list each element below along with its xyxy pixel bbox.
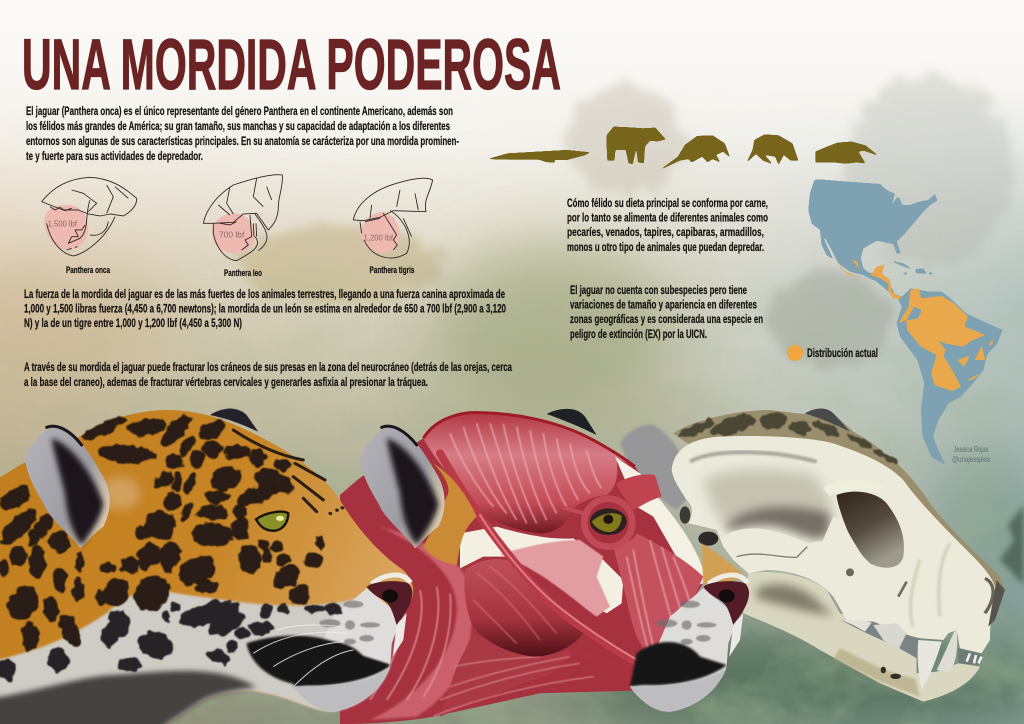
icon: tapir (607, 127, 666, 164)
orange fur on snout (702, 543, 745, 584)
ear (25, 426, 110, 548)
intro text block: te y fuerte para sus actividades de depredador. (26, 149, 203, 163)
ear with fur patch (360, 426, 477, 565)
second ear sliver (547, 409, 597, 435)
muzzle (293, 575, 412, 712)
icon: armadillo (660, 135, 730, 170)
subspecies text block: peligro de extinción (EX) por la UICN. (570, 327, 707, 341)
muscle: lower bands (570, 647, 650, 688)
muscle: neck (370, 527, 593, 720)
subspecies text block: zonas geográficas y es considerada una especie en (570, 312, 763, 326)
intro text block: El jaguar (Panthera onca) es el único representante del género Panthera en el continente Americano, además son (26, 104, 453, 118)
skull: mandible (743, 572, 980, 702)
spots on pale fur (0, 596, 341, 680)
legend: current distribution: Distribución actual (807, 346, 878, 360)
subspecies text block: variaciones de tamaño y apariencia en diferentes (570, 298, 757, 312)
skull: eye socket (837, 492, 904, 568)
skull diagram: Panthera tigris (353, 178, 433, 258)
skull: jaw shadow (757, 584, 833, 615)
author credit: Jessica Rojas (954, 444, 988, 454)
map: South America (897, 288, 1003, 465)
subspecies text block (570, 283, 763, 341)
bite force text block: 1,000 y 1,500 libras fuerza (4,450 a 6,700 newtons); la mordida de un león se estima en alrededor de 650 a 700 lbf (2,900 a 3,120 (24, 302, 506, 316)
eye (256, 512, 288, 531)
label: Panthera onca: Panthera onca (66, 265, 110, 276)
illustration: jaguar head with fur (0, 409, 413, 724)
distribution map of the Americas (808, 179, 1003, 465)
diet text block: monos u otro tipo de animales que puedan depredar. (567, 240, 764, 254)
fur base (0, 410, 413, 724)
label: Panthera leo: Panthera leo (224, 268, 262, 279)
bite force text block (24, 287, 506, 330)
map: South America range (898, 288, 993, 391)
author credit: @unajessjess (952, 454, 990, 464)
diet text block: pecaríes, venados, tapires, capibaras, armadillos, (567, 225, 764, 239)
diet text block: Cómo félido su dieta principal se conforma por carne, (567, 196, 768, 210)
diet text block (567, 196, 768, 254)
skull fracture text block (24, 360, 512, 389)
skull: auditory openings (698, 532, 718, 546)
label: Panthera tigris: Panthera tigris (370, 265, 414, 276)
intro text block (26, 104, 459, 163)
pale underside fur (0, 591, 400, 724)
illustration: jaguar muscle anatomy (340, 409, 749, 724)
muscle: cheek (500, 540, 610, 617)
muscle: base silhouette (340, 413, 703, 724)
illustration: faded jaguar behind the skull (620, 408, 1005, 633)
muscle: snout levators (613, 533, 703, 658)
skull: nasal opening (985, 578, 993, 613)
forehead stripes (233, 430, 343, 514)
subspecies text block: El jaguar no cuenta con subespecies pero tiene (570, 283, 747, 297)
diet text block: por lo tanto se alimenta de diferentes animales como (567, 210, 768, 224)
skull: cranium (672, 436, 996, 653)
icon: peccary (747, 134, 798, 165)
map: Central America range (832, 248, 905, 299)
skull diagram: Panthera leo (203, 175, 282, 261)
icon: caiman (488, 150, 590, 163)
whiskers (253, 625, 353, 687)
illustration: jaguar skull (672, 436, 1005, 702)
bone: zygomatic and cheek (460, 527, 623, 613)
muscle: temporalis (423, 413, 635, 533)
skull comparison diagrams (42, 175, 433, 279)
map: North and Central America (808, 179, 937, 301)
skull fracture text block: A través de su mordida el jaguar puede fracturar los cráneos de sus presas en la zona del neurocráneo (detrás de las orejas, cerca (24, 360, 512, 374)
prey silhouettes (488, 127, 878, 170)
intro text block: los félidos más grandes de América; su gran tamaño, sus manchas y su capacidad de adaptación a los diferentes (26, 119, 450, 133)
skull: teeth (842, 620, 983, 689)
dark throat shadow (0, 671, 257, 724)
bone: snout (615, 457, 703, 587)
rosettes and spots (0, 412, 324, 650)
skull diagram: Panthera tigris: 1,200 lbf (364, 233, 393, 243)
far ear (210, 409, 258, 432)
skull diagram: Panthera onca: 1,500 lbf (48, 218, 78, 228)
black lip band (247, 636, 390, 685)
intro text block: entornos son algunas de sus características principales. En su anatomía se carácteriza por una mordida prominen- (26, 134, 459, 148)
cream fur behind ear (100, 477, 140, 510)
icon: anteater (815, 142, 878, 163)
skull diagram: Panthera leo: 700 lbf (219, 229, 245, 239)
title: UNA MORDIDA PODEROSA (22, 26, 561, 105)
bite force text block: La fuerza de la mordida del jaguar es de las más fuertes de los animales terrestres, llegando a una fuerza canina aproximada de (24, 287, 505, 301)
bite force text block: N) y la de un tigre entre 1,000 y 1,200 lbf (4,450 a 5,300 N) (24, 316, 242, 330)
legend: current distribution (787, 345, 878, 361)
author credit (952, 444, 990, 464)
skull diagram: Panthera onca (42, 177, 137, 256)
muzzle (630, 575, 749, 712)
skull fracture text block: a la base del craneo), ademas de fracturar vértebras cervicales y generarles asfixia al presionar la tráquea. (24, 375, 428, 389)
muscle: masseter (464, 559, 583, 657)
muscle: zygomaticus strap (440, 453, 650, 670)
muscle: orbicularis around eye (563, 474, 662, 547)
